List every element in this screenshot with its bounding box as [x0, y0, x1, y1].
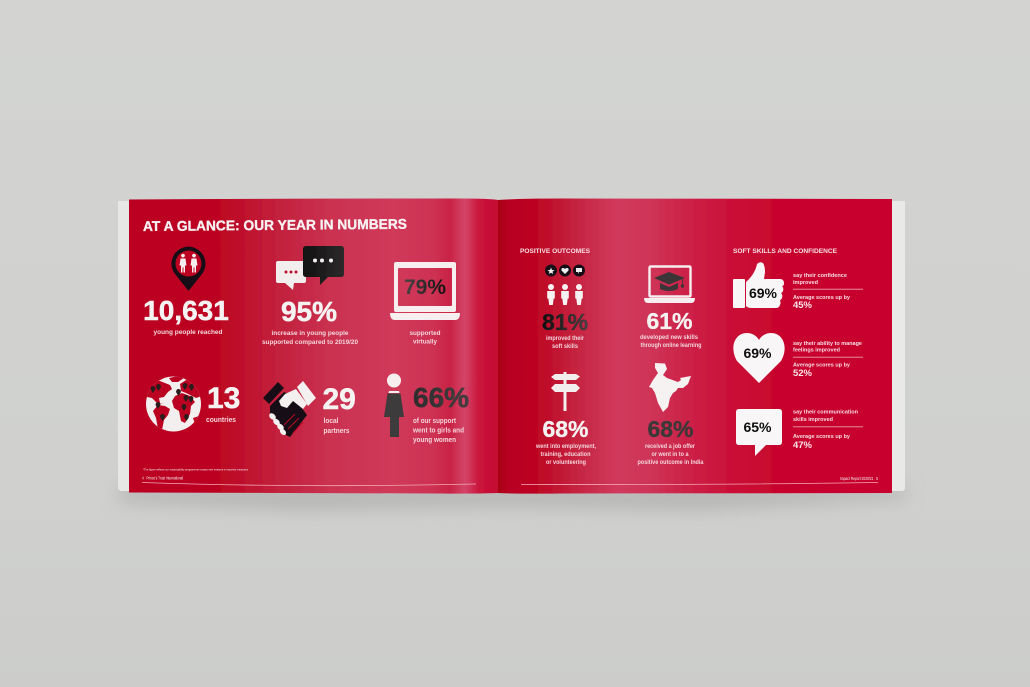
- stat: supported virtually: virtually: [413, 338, 437, 346]
- stat: increase in young people: supported compared to 2019/20: [262, 339, 358, 346]
- right footer rule: [521, 482, 878, 485]
- stat: outcomes in India: or went in to a: [652, 452, 689, 458]
- stat: girls and young women: young women: [413, 437, 456, 444]
- stat: online learning: [640, 266, 702, 349]
- stat: confidence: improved: [793, 280, 819, 286]
- icon: laptop with 79%: 79%: [404, 276, 446, 299]
- stat: young people reached: 10,631: [143, 295, 229, 326]
- stat: confidence: Average scores up by: [793, 295, 851, 301]
- stat: girls and young women: of our support: [413, 418, 457, 425]
- stat: local partners: 29: [322, 383, 356, 416]
- icon: woman figure: [384, 374, 404, 437]
- stat: communication: skills improved: [793, 417, 834, 423]
- left footer: 4 Prince's Trust International: [142, 476, 183, 480]
- icon: handshake: [263, 381, 316, 437]
- section heading: soft skills and confidence: SOFT SKILLS AND CONFIDENCE: [733, 248, 837, 255]
- right page: [498, 198, 892, 494]
- book shadow: [118, 486, 906, 510]
- stat: employment, training, education: [535, 372, 596, 466]
- stat: young people reached: young people reached: [154, 329, 223, 336]
- stat: girls and young women: 66%: [413, 382, 469, 413]
- icon: speech bubble with 65%: 65%: [743, 419, 772, 435]
- stat: managing feelings: feelings improved: [793, 348, 841, 354]
- icon: three people with skill badges: [545, 264, 585, 305]
- stat: supported virtually: [390, 262, 460, 346]
- stat: employment, training, education: training, education: [540, 452, 591, 458]
- page edges: [118, 201, 905, 491]
- stat: outcomes in India: positive outcome in India: [638, 460, 704, 466]
- stat: supported virtually: supported: [410, 330, 441, 337]
- stat: online learning: developed new skills: [640, 335, 699, 341]
- stat: communication: 47%: [793, 440, 812, 451]
- stat: young people reached: [143, 247, 229, 336]
- stat: local partners: [263, 381, 356, 437]
- stat: communication: [736, 409, 863, 456]
- right footer: Impact Report 2020/21 5: [840, 476, 878, 481]
- stat: confidence: say their confidence: [793, 273, 847, 279]
- stat: local partners: local: [324, 418, 339, 425]
- stat: managing feelings: Average scores up by: [793, 362, 851, 368]
- title: AT A GLANCE: OUR YEAR IN NUMBERS: [143, 216, 407, 234]
- stat: online learning: 61%: [646, 308, 693, 334]
- stat: soft skills: improved their: [546, 336, 585, 342]
- stat: countries: countries: [206, 417, 236, 424]
- stat: confidence: [733, 262, 863, 311]
- icon: signpost: [551, 372, 580, 411]
- left page: [129, 198, 498, 494]
- stat: countries: 13: [207, 382, 240, 415]
- stat: girls and young women: [384, 374, 469, 444]
- section heading: positive outcomes: POSITIVE OUTCOMES: [520, 248, 590, 255]
- icon: thumbs up with 69%: 69%: [749, 285, 778, 301]
- stat: soft skills: [542, 264, 588, 350]
- icon: speech bubbles: [276, 246, 344, 290]
- infographic: open report mockup: [116, 198, 906, 516]
- stat: employment, training, education: went into employment,: [535, 444, 596, 450]
- stat: outcomes in India: received a job offer: [645, 444, 696, 450]
- stat: managing feelings: [733, 333, 863, 383]
- stat: communication: say their communication: [793, 410, 859, 416]
- stat: online learning: through online learning: [640, 343, 702, 349]
- stat: employment, training, education: 68%: [542, 416, 589, 442]
- stat: soft skills: 81%: [542, 309, 588, 335]
- icon: heart with 69%: 69%: [743, 345, 772, 361]
- stat: increase in young people: 95%: [281, 296, 337, 327]
- stat: outcomes in India: [638, 363, 704, 466]
- stat: confidence: 45%: [793, 300, 812, 311]
- icon: globe with location pins: [146, 376, 203, 432]
- stat: increase in young people: [262, 246, 358, 346]
- stat: communication: Average scores up by: [793, 434, 851, 440]
- stat: soft skills: soft skills: [552, 344, 579, 350]
- stat: local partners: partners: [324, 428, 350, 435]
- stat: outcomes in India: 68%: [647, 416, 694, 442]
- icon: map of India: [649, 363, 691, 412]
- icon: location pin with people: [172, 247, 206, 291]
- footnote: *The figure reflects our employability programmes except new entrants in reported measures: [143, 468, 248, 472]
- stat: managing feelings: 52%: [793, 368, 812, 379]
- stat: increase in young people: increase in young people: [272, 330, 349, 337]
- stat: countries: [146, 376, 240, 432]
- left footer rule: [142, 482, 476, 486]
- stat: managing feelings: say their ability to manage: [793, 341, 862, 347]
- stat: girls and young women: went to girls and: [412, 428, 464, 434]
- icon: laptop with graduation cap: [644, 266, 695, 303]
- stat: employment, training, education: or volunteering: [546, 460, 586, 466]
